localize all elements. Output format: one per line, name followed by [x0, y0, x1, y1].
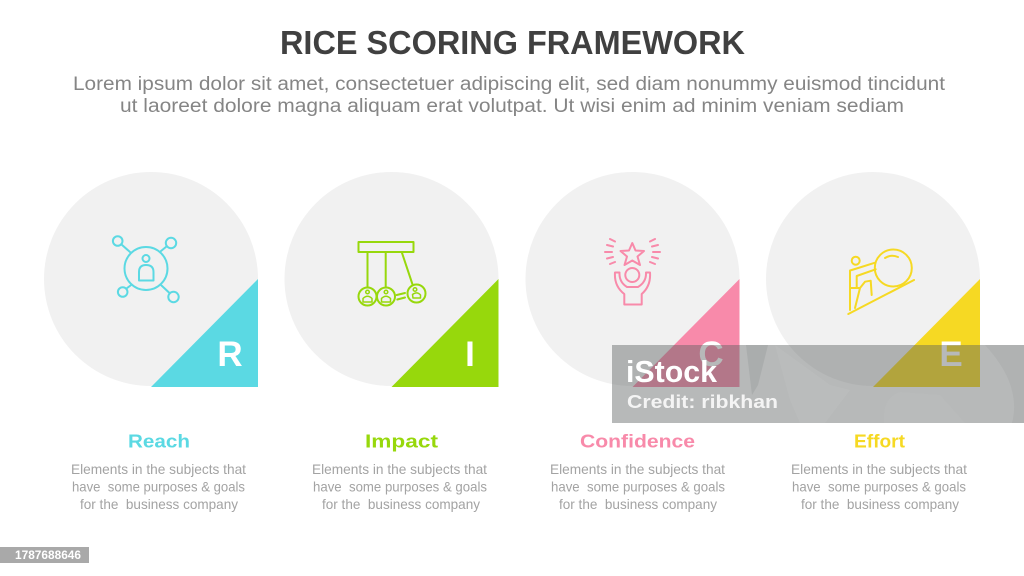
heading: impact: Impact	[365, 432, 438, 452]
text: effort description: have some purposes & goals	[792, 478, 966, 494]
text: reach description	[71, 461, 246, 512]
panel: reach: R	[217, 335, 243, 374]
subtitle: Lorem ipsum dolor sit amet, consectetuer adipiscing elit, sed diam nonummy euismod tincidunt	[73, 74, 946, 95]
image id tag: 1787688646	[15, 550, 81, 562]
title: RICE SCORING FRAMEWORK	[280, 24, 745, 61]
panel: effort	[766, 172, 980, 512]
panel: reach	[44, 172, 258, 512]
icon: impact pendulum	[358, 242, 426, 306]
watermark: credit: Credit: ribkhan	[627, 392, 778, 412]
text: reach description: Elements in the subjects that	[71, 461, 246, 477]
icon: confidence star	[605, 239, 660, 304]
panel: impact	[284, 172, 498, 512]
heading: effort: Effort	[854, 432, 905, 452]
text: impact description: Elements in the subjects that	[312, 461, 487, 477]
text: effort description	[791, 461, 967, 512]
panel: confidence	[526, 172, 740, 512]
panel: impact: I	[465, 335, 475, 374]
text: confidence description: have some purposes & goals	[551, 478, 725, 494]
text: effort description: Elements in the subjects that	[791, 461, 967, 477]
heading: confidence: Confidence	[580, 432, 695, 452]
text: impact description	[312, 461, 487, 512]
text: confidence description: Elements in the subjects that	[550, 461, 725, 477]
panel: confidence: C	[698, 335, 724, 374]
text: reach description: for the business company	[80, 496, 238, 512]
panel: effort: E	[939, 335, 963, 374]
subtitle: ut laoreet dolore magna aliquam erat volutpat. Ut wisi enim ad minim veniam sediam	[120, 96, 904, 117]
icon: reach network	[113, 236, 179, 302]
watermark band	[612, 345, 1024, 423]
text: effort description: for the business company	[801, 496, 959, 512]
icon: effort boulder	[848, 250, 914, 314]
subtitle	[73, 74, 946, 117]
text: reach description: have some purposes & goals	[72, 478, 245, 494]
image id tag	[0, 547, 89, 563]
text: confidence description: for the business company	[559, 496, 717, 512]
watermark: iStock logo: iStock	[626, 354, 718, 389]
text: impact description: have some purposes & goals	[313, 478, 487, 494]
text: confidence description	[550, 461, 725, 512]
text: impact description: for the business company	[322, 496, 480, 512]
heading: reach: Reach	[128, 432, 190, 452]
